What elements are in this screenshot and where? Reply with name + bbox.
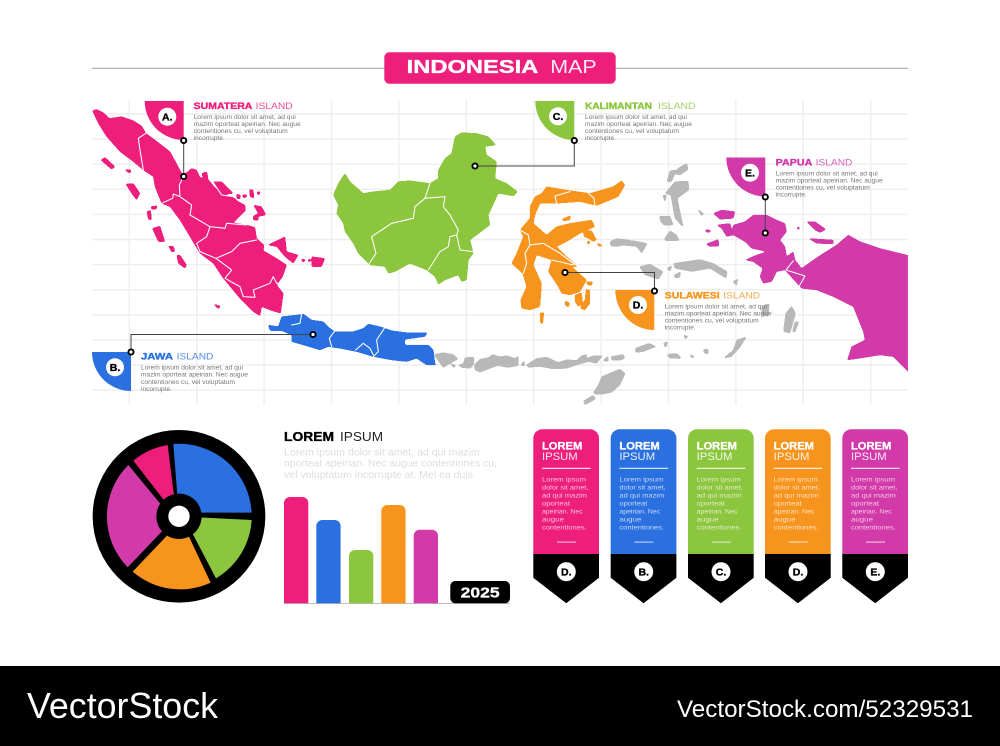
callout C: Kalimantan (472, 101, 696, 169)
card 3: green: oporteat (697, 501, 725, 508)
card 2: blue: dolor sit amet, (619, 485, 666, 492)
callout B: Jawa: contentiones cu, vel voluptatum (141, 379, 235, 386)
callout E: Papua: PAPUA (776, 158, 813, 169)
bar chart: 2025 (461, 584, 500, 601)
card 4: orange: LOREM (774, 441, 814, 453)
footer bar (0, 666, 1000, 746)
map: Sumatera (92, 109, 325, 316)
callout A: Sumatera (145, 101, 301, 179)
callout E: Papua: E. (745, 167, 755, 179)
footer bar: VectorStock.com/52329531 (677, 696, 973, 723)
chart heading and text: LOREM (284, 429, 334, 444)
callout B: Jawa (92, 332, 316, 393)
callout E: Papua: ISLAND (816, 158, 853, 169)
card 1: pink: dolor sit amet, (542, 485, 588, 492)
card 5: magenta: augue (851, 517, 873, 524)
card 2: blue: contentiones. (619, 525, 664, 532)
callout C: Kalimantan: contentiones cu, vel voluptatum (585, 128, 679, 135)
callout B: Jawa: incorrupte. (141, 386, 172, 393)
donut chart (93, 430, 265, 603)
card 5: magenta: ad qui mazim (851, 493, 896, 500)
card 4: orange: ad qui mazim (774, 493, 819, 500)
card 3: green: LOREM (697, 441, 737, 453)
callout E: Papua: incorrupte. (776, 192, 807, 199)
callout E: Papua (726, 158, 883, 236)
card 4: orange: contentiones. (774, 525, 819, 532)
card 2: blue: IPSUM (619, 451, 655, 463)
card 4: orange: apeirian. Nec (774, 509, 815, 516)
map: Kalimantan (333, 133, 518, 284)
callout D: Sulawesi: Lorem ipsum dolor sit amet, ad qui (665, 303, 767, 310)
card 5: magenta: oporteat (851, 501, 879, 508)
callout D: Sulawesi (562, 270, 772, 332)
card 5: magenta: Lorem ipsum (851, 477, 895, 484)
card 4: orange: dolor sit amet, (774, 485, 820, 492)
chart heading and text: oporteat apeirian. Nec augue contentiones cu, (284, 458, 497, 470)
title banner: MAP (550, 57, 597, 77)
card 4: orange (765, 429, 831, 603)
callout B: Jawa: JAWA (141, 352, 173, 363)
card 3: green: augue (697, 517, 719, 524)
card 4: orange: augue (774, 517, 796, 524)
card 1: pink: IPSUM (542, 451, 578, 463)
callout D: Sulawesi: D. (633, 300, 643, 312)
callout B: Jawa: mazim oporteat apeirian. Nec augue (141, 372, 248, 379)
map: gray islands (434, 163, 799, 405)
card 3: green: apeirian. Nec (697, 509, 738, 516)
card 1: pink: LOREM (542, 441, 582, 453)
card 5: magenta: E. (870, 566, 880, 578)
card 1: pink: contentiones. (542, 525, 587, 532)
chart heading and text: vel voluptatum incorrupte at. Mel ea duis (284, 469, 473, 481)
callout A: Sumatera: A. (162, 111, 173, 123)
card 5: magenta: dolor sit amet, (851, 485, 897, 492)
card 2: blue: B. (638, 566, 649, 578)
card 3: green: ad qui mazim (697, 493, 742, 500)
card 1: pink: D. (561, 566, 572, 578)
card 4: orange: oporteat (774, 501, 802, 508)
chart heading and text: IPSUM (340, 429, 383, 444)
card 3: green: C. (716, 566, 726, 578)
card 1: pink: Lorem ipsum (542, 477, 586, 484)
card 5: magenta: IPSUM (851, 451, 887, 463)
card 1: pink: ad qui mazim (542, 493, 587, 500)
map: Sulawesi (512, 181, 625, 325)
card 2: blue: Lorem ipsum (619, 477, 664, 484)
callout D: Sulawesi: SULAWESI (665, 291, 720, 302)
card 3: green (688, 429, 754, 603)
callout A: Sumatera: SUMATERA (194, 101, 253, 112)
callout A: Sumatera: ISLAND (256, 101, 293, 112)
title banner (92, 52, 908, 84)
callout D: Sulawesi: contentiones cu, vel voluptatum (665, 317, 759, 324)
card 5: magenta: contentiones. (851, 525, 896, 532)
map grid (92, 100, 908, 405)
card 3: green: contentiones. (697, 525, 742, 532)
callout D: Sulawesi: ISLAND (723, 291, 760, 302)
card 2: blue: ad qui mazim (619, 493, 665, 500)
callout C: Kalimantan: incorrupte. (585, 135, 616, 142)
card 1: pink: oporteat (542, 501, 570, 508)
bar chart (284, 497, 510, 604)
card 5: magenta (842, 429, 908, 603)
callout A: Sumatera: mazim oporteat apeirian. Nec augue (194, 121, 301, 128)
map: Papua (706, 210, 918, 383)
callout B: Jawa: ISLAND (177, 352, 214, 363)
callout D: Sulawesi: incorrupte. (665, 325, 696, 332)
card 4: orange: IPSUM (774, 451, 809, 463)
card 3: green: dolor sit amet, (697, 485, 743, 492)
card 2: blue (611, 429, 676, 603)
callout A: Sumatera: incorrupte. (194, 135, 225, 142)
card 2: blue: apeirian. Nec (619, 509, 661, 516)
callout C: Kalimantan: Lorem ipsum dolor sit amet, ad qui (585, 114, 687, 121)
card 2: blue: LOREM (619, 441, 660, 453)
card 3: green: IPSUM (697, 451, 732, 463)
card 1: pink: apeirian. Nec (542, 509, 583, 516)
callout A: Sumatera: Lorem ipsum dolor sit amet, ad qui (194, 114, 296, 121)
card 1: pink (533, 429, 599, 603)
callout E: Papua: contentiones cu, vel voluptatum (776, 185, 870, 192)
callout E: Papua: mazim oporteat apeirian. Nec augue (776, 177, 883, 184)
map: Jawa (268, 314, 437, 365)
card 3: green: Lorem ipsum (697, 477, 741, 484)
callout C: Kalimantan: ISLAND (658, 101, 696, 112)
card 5: magenta: apeirian. Nec (851, 509, 892, 516)
card 4: orange: Lorem ipsum (774, 477, 818, 484)
card 1: pink: augue (542, 517, 564, 524)
title banner: INDONESIA (407, 57, 538, 77)
callout C: Kalimantan: mazim oporteat apeirian. Nec augue (585, 121, 692, 128)
callout D: Sulawesi: mazim oporteat apeirian. Nec augue (665, 310, 772, 317)
card 5: magenta: LOREM (851, 441, 891, 453)
callout E: Papua: Lorem ipsum dolor sit amet, ad qui (776, 170, 878, 177)
callout C: Kalimantan: C. (553, 111, 563, 123)
card 2: blue: oporteat (619, 501, 648, 508)
footer bar: VectorStock (27, 685, 219, 726)
card 4: orange: D. (793, 566, 803, 578)
callout A: Sumatera: contentiones cu, vel voluptatum (194, 128, 288, 135)
callout B: Jawa: B. (110, 362, 120, 374)
callout B: Jawa: Lorem ipsum dolor sit amet, ad qui (141, 365, 243, 372)
chart heading and text (284, 429, 497, 481)
callout C: Kalimantan: KALIMANTAN (585, 101, 652, 112)
chart heading and text: Lorem ipsum dolor sit amet, ad qui mazim (284, 447, 480, 459)
card 2: blue: augue (619, 517, 642, 524)
